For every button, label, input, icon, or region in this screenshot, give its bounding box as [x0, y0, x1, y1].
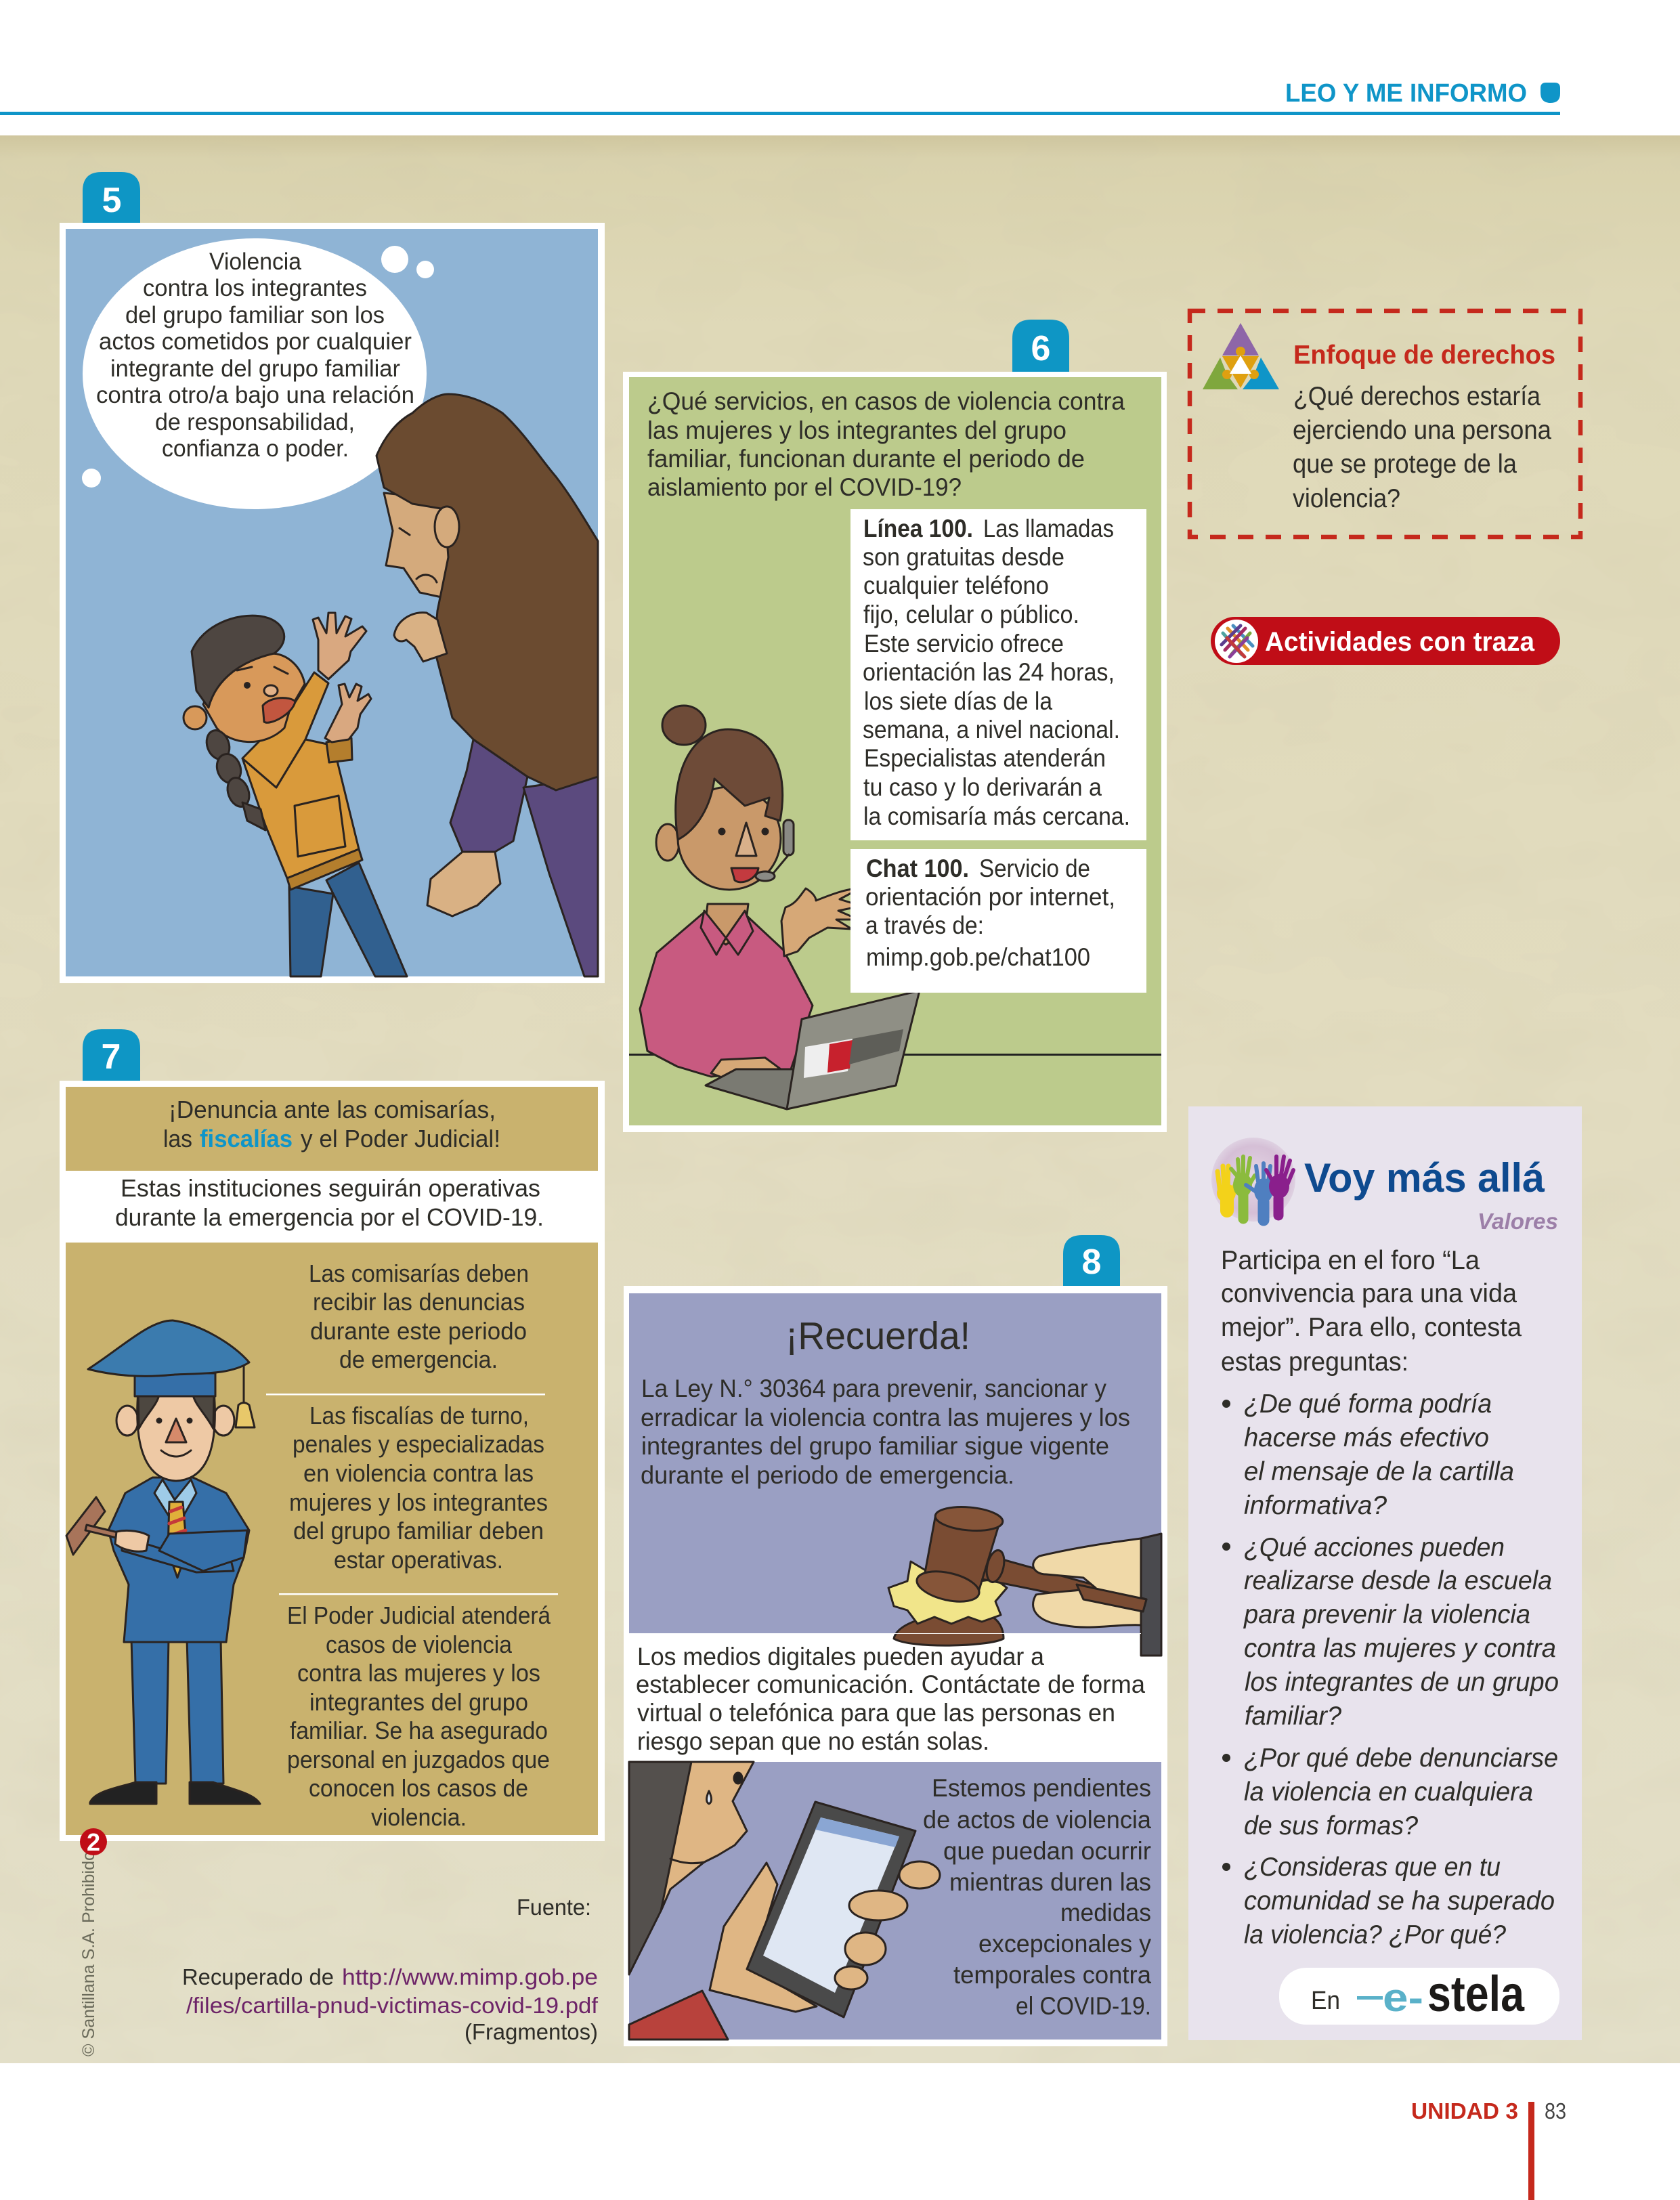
subheading: Valores	[1478, 1209, 1558, 1234]
intro text: Participa en el foro “La	[1221, 1246, 1480, 1275]
tab number 6: 6	[1031, 329, 1050, 368]
text: Poder Judicial: familiar. Se ha asegurado	[290, 1717, 548, 1744]
heading text: fiscalías	[200, 1125, 293, 1152]
icon: raised hands	[1211, 1138, 1295, 1222]
question: ¿Qué derechos estaría	[1293, 382, 1541, 411]
question list: hacerse más efectivo	[1244, 1423, 1489, 1452]
text: stay alert: Estemos pendientes	[932, 1774, 1151, 1802]
text: fiscalías: en violencia contra las	[303, 1459, 534, 1487]
question list: la violencia en cualquiera	[1244, 1777, 1533, 1807]
source note: /files/cartilla-pnud-victimas-covid-19.pdf	[186, 1993, 599, 2018]
subheading text: Estas instituciones seguirán operativas	[121, 1174, 540, 1202]
text: definition: del grupo familiar son los	[125, 302, 385, 328]
e-stela pill: En	[1311, 1987, 1340, 2015]
text: definition: integrante del grupo familiar	[110, 355, 400, 382]
illustration: laptop	[706, 991, 920, 1109]
e-stela pill	[1279, 1966, 1559, 2025]
white band text: virtual o telefónica para que las personas en	[637, 1699, 1115, 1727]
box: Línea 100: son gratuitas desde	[863, 543, 1064, 571]
law text	[641, 1375, 1130, 1489]
intro text: convivencia para una vida	[1221, 1279, 1517, 1308]
illustration: gavel in hand	[888, 1505, 1161, 1656]
text: Poder Judicial	[287, 1601, 551, 1831]
white band text: establecer comunicación. Contáctate de forma	[636, 1670, 1145, 1698]
question text: ¿Qué servicios, en casos de violencia contra	[647, 387, 1125, 415]
tab number 7	[83, 1029, 140, 1081]
text: stay alert: temporales contra	[953, 1961, 1151, 1989]
badge: Actividades con traza	[1211, 617, 1560, 665]
question: violencia?	[1293, 484, 1400, 513]
question list: ¿Qué acciones pueden	[1244, 1533, 1505, 1562]
panel 6: services	[623, 320, 1167, 1132]
text: stay alert: de actos de violencia	[923, 1806, 1151, 1834]
white band text: Los medios digitales pueden ayudar a	[637, 1643, 1044, 1670]
callout: Enfoque de derechos: Enfoque de derechos	[1293, 341, 1555, 370]
text: fiscalías: estar operativas.	[334, 1546, 503, 1574]
text: fiscalías: penales y especializadas	[293, 1430, 544, 1458]
illustration: person with phone	[629, 1762, 940, 2040]
text: stay alert: el COVID-19.	[1016, 1992, 1151, 2020]
footer: unit and page number: 83	[1545, 2098, 1566, 2123]
heading: ¡Recuerda!	[785, 1314, 970, 1358]
text: stay alert	[923, 1774, 1151, 2020]
text: stay alert: mientras duren las	[949, 1868, 1151, 1896]
text: Poder Judicial: personal en juzgados que	[287, 1746, 550, 1773]
question list: la violencia? ¿Por qué?	[1244, 1920, 1506, 1949]
question list	[1222, 1389, 1559, 1949]
text: Poder Judicial: integrantes del grupo	[309, 1688, 528, 1716]
question text: aislamiento por el COVID-19?	[647, 473, 962, 501]
text: comisarías: de emergencia.	[339, 1345, 498, 1373]
text: comisarías	[309, 1259, 529, 1373]
icon: rights triangle	[1203, 323, 1279, 389]
box: Línea 100: tu caso y lo derivarán a	[863, 773, 1102, 801]
tab number 6	[1012, 320, 1069, 372]
box: Línea 100: Las llamadas	[983, 515, 1114, 542]
text: definition	[96, 249, 414, 462]
law text: La Ley N.° 30364 para prevenir, sancionar y	[641, 1375, 1106, 1402]
question list: ¿Consideras que en tu	[1244, 1853, 1501, 1882]
question list: el mensaje de la cartilla	[1244, 1457, 1514, 1486]
box: Línea 100: orientación las 24 horas,	[863, 658, 1115, 686]
box: Chat 100	[850, 849, 1146, 993]
question text	[647, 387, 1125, 501]
question list: realizarse desde la escuela	[1244, 1566, 1552, 1595]
box: Chat 100: a través de:	[865, 911, 984, 939]
text: Poder Judicial: contra las mujeres y los	[297, 1659, 540, 1687]
table line	[629, 1054, 1161, 1056]
box: Línea 100: la comisaría más cercana.	[863, 802, 1130, 830]
law text: erradicar la violencia contra las mujeres y los	[641, 1404, 1130, 1431]
box: Línea 100: Este servicio ofrece	[864, 630, 1064, 657]
question: ejerciendo una persona	[1293, 416, 1551, 445]
thought bubble	[82, 238, 434, 509]
text: fiscalías: Las fiscalías de turno,	[309, 1402, 529, 1429]
text: Poder Judicial: El Poder Judicial atenderá	[287, 1601, 551, 1629]
intro text: mejor”. Para ello, contesta	[1221, 1313, 1522, 1342]
source note: Recuperado de	[182, 1964, 334, 1989]
question list: para prevenir la violencia	[1243, 1600, 1530, 1629]
subheading text: durante la emergencia por el COVID-19.	[115, 1203, 544, 1231]
panel 5: definition of violence	[60, 172, 605, 983]
callout: Enfoque de derechos	[1190, 311, 1580, 537]
badge: number 2	[80, 1828, 107, 1856]
badge: number 2: 2	[87, 1828, 100, 1856]
text: fiscalías: mujeres y los integrantes	[289, 1488, 548, 1516]
text: definition: confianza o poder.	[162, 435, 349, 462]
illustration: operator	[640, 706, 861, 1087]
text: comisarías: durante este periodo	[310, 1317, 527, 1345]
white band text	[629, 1633, 1145, 1755]
text: comisarías: Las comisarías deben	[309, 1259, 529, 1287]
header: section title: LEO Y ME INFORMO	[1285, 79, 1527, 108]
source note: http://www.mimp.gob.pe	[342, 1964, 598, 1989]
box: Línea 100	[850, 509, 1146, 840]
panel 8: remember	[624, 1235, 1167, 2046]
footer: unit and page number	[1411, 2098, 1566, 2200]
text: definition: contra los integrantes	[143, 275, 367, 301]
intro text: estas preguntas:	[1221, 1347, 1408, 1377]
box: Línea 100: fijo, celular o público.	[863, 601, 1079, 628]
law text: integrantes del grupo familiar sigue vigente	[641, 1432, 1109, 1460]
text: Poder Judicial: casos de violencia	[326, 1631, 513, 1658]
text: definition: de responsabilidad,	[155, 409, 355, 435]
question list: comunidad se ha superado	[1244, 1886, 1555, 1916]
text: definition: actos cometidos por cualquier	[99, 328, 412, 355]
heading text	[163, 1096, 500, 1152]
text: fiscalías: del grupo familiar deben	[293, 1517, 544, 1545]
white band text: riesgo sepan que no están solas.	[637, 1727, 989, 1755]
text: definition: Violencia	[209, 249, 302, 275]
tab number 5	[83, 172, 140, 223]
header: section title	[0, 79, 1560, 115]
box: Línea 100: semana, a nivel nacional.	[863, 716, 1120, 743]
source note: (Fragmentos)	[465, 2019, 598, 2044]
question text: familiar, funcionan durante el periodo de	[647, 445, 1085, 473]
illustration: judge	[66, 1320, 260, 1804]
question	[1293, 382, 1551, 513]
panel 7: where to report	[60, 1029, 605, 1841]
intro text	[1221, 1246, 1522, 1377]
question list: ¿Por qué debe denunciarse	[1244, 1744, 1558, 1773]
subheading text	[115, 1174, 544, 1231]
footer: unit and page number: UNIDAD 3	[1411, 2098, 1518, 2123]
text: Poder Judicial: violencia.	[371, 1803, 467, 1831]
box: Chat 100: Servicio de	[979, 855, 1090, 882]
source note	[182, 1895, 599, 2044]
text: stay alert: excepcionales y	[978, 1930, 1151, 1958]
question list: informativa?	[1244, 1491, 1387, 1520]
box: Chat 100: mimp.gob.pe/chat100	[866, 943, 1090, 971]
text: definition: contra otro/a bajo una relación	[96, 382, 414, 408]
tab number 8	[1063, 1235, 1120, 1286]
source note: Fuente:	[517, 1895, 591, 1920]
text: fiscalías	[289, 1402, 548, 1574]
question list: de sus formas?	[1244, 1811, 1418, 1840]
heading text: ¡Denuncia ante las comisarías,	[169, 1096, 496, 1123]
text: stay alert: que puedan ocurrir	[943, 1837, 1151, 1865]
question: que se protege de la	[1293, 450, 1517, 479]
box: Chat 100: Chat 100.	[866, 855, 969, 882]
question list: ¿De qué forma podría	[1244, 1389, 1492, 1419]
badge: Actividades con traza: Actividades con traza	[1265, 627, 1535, 657]
question list: contra las mujeres y contra	[1244, 1634, 1556, 1663]
box: Línea 100: Especialistas atenderán	[864, 744, 1106, 772]
text: Poder Judicial: conocen los casos de	[309, 1774, 528, 1802]
text: comisarías: recibir las denuncias	[313, 1288, 525, 1316]
question list: los integrantes de un grupo	[1245, 1668, 1559, 1697]
law text: durante el periodo de emergencia.	[641, 1461, 1014, 1489]
box: Línea 100: los siete días de la	[864, 687, 1052, 715]
e-stela pill: e-	[1383, 1976, 1423, 2020]
box: Chat 100: orientación por internet,	[865, 883, 1115, 911]
copyright notice: © Santillana S.A. Prohibido	[79, 1851, 98, 2056]
panel: Voy más allá	[1188, 1106, 1582, 2040]
question list: familiar?	[1245, 1702, 1341, 1731]
text: stay alert: medidas	[1060, 1899, 1151, 1926]
question text: las mujeres y los integrantes del grupo	[647, 416, 1067, 444]
heading: Voy más allá	[1304, 1155, 1545, 1201]
box: Línea 100: Línea 100.	[863, 515, 973, 542]
heading text: las	[163, 1125, 192, 1152]
e-stela pill: stela	[1427, 1966, 1525, 2022]
illustration: girl	[184, 613, 407, 976]
tab number 7: 7	[102, 1037, 121, 1077]
tab number 5: 5	[102, 181, 121, 220]
illustration: woman	[376, 394, 598, 976]
heading text: y el Poder Judicial!	[301, 1125, 500, 1152]
tab number 8: 8	[1082, 1243, 1101, 1282]
icon: woven knot	[1222, 626, 1253, 657]
box: Línea 100: cualquier teléfono	[863, 571, 1049, 599]
